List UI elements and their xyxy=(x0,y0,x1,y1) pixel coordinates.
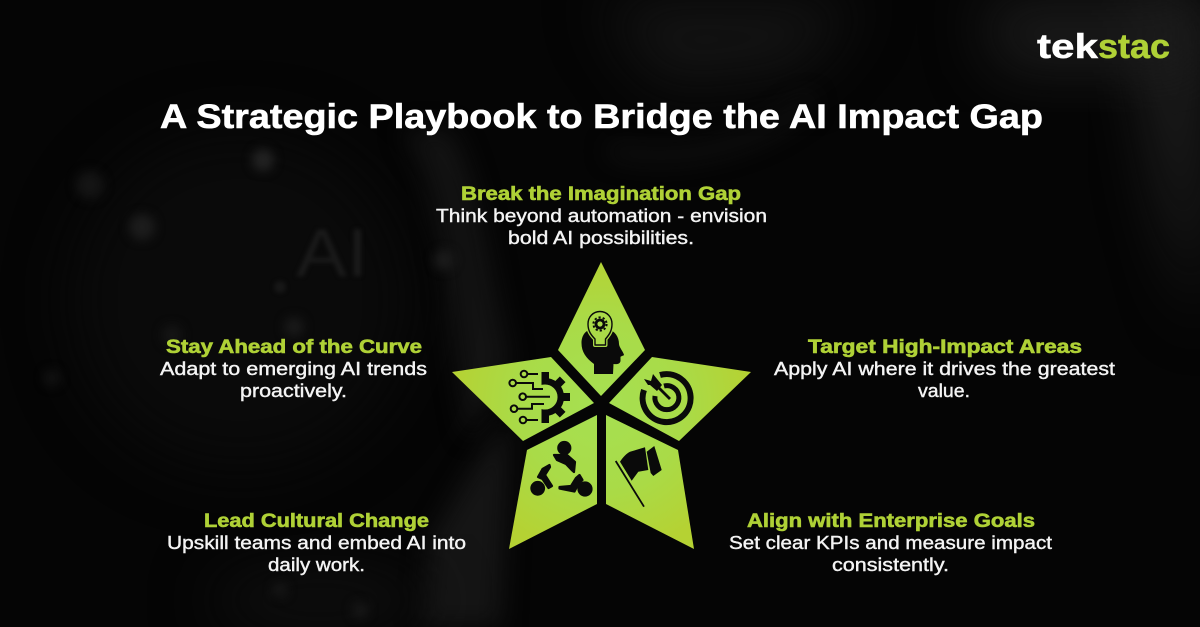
text block: Target High-Impact Areas xyxy=(774,337,1115,401)
text block: Lead Cultural Change: daily work. xyxy=(268,554,365,575)
text block: Break the Imagination Gap xyxy=(436,184,767,248)
text block: Stay Ahead of the Curve: proactively. xyxy=(240,380,347,401)
logo: tekstac xyxy=(1037,28,1170,66)
text block: Break the Imagination Gap: bold AI possibilities. xyxy=(508,227,694,248)
blurred AI letters: AI xyxy=(296,215,368,291)
text block: Break the Imagination Gap: Break the Imagination Gap xyxy=(461,184,741,205)
text block: Lead Cultural Change xyxy=(167,511,466,575)
panel: bottom right star segment xyxy=(606,415,694,549)
text block: Lead Cultural Change: Lead Cultural Change xyxy=(204,511,429,532)
icon: head with lightbulb and gear xyxy=(582,312,624,374)
text block: Target High-Impact Areas: value. xyxy=(918,380,970,401)
icon: target with arrow xyxy=(643,374,691,422)
text block: Align with Enterprise Goals: consistently. xyxy=(832,554,949,575)
icon: gear with circuit lines xyxy=(509,371,570,423)
panel: top star segment xyxy=(558,262,645,396)
text block: Align with Enterprise Goals xyxy=(729,511,1052,575)
icon: three people in a circle xyxy=(531,442,592,496)
logo: tekstac: stac xyxy=(1098,28,1170,66)
title: A Strategic Playbook to Bridge the AI Impact Gap xyxy=(160,98,1043,136)
text block: Align with Enterprise Goals: Set clear KPIs and measure impact xyxy=(729,532,1052,553)
text block: Target High-Impact Areas: Target High-Impact Areas xyxy=(808,337,1082,358)
star diagram xyxy=(452,262,751,549)
panel: bottom left star segment xyxy=(509,415,597,549)
text block: Stay Ahead of the Curve xyxy=(160,337,427,401)
text block: Stay Ahead of the Curve: Adapt to emerging AI trends xyxy=(160,358,427,379)
icon: flags on a pole xyxy=(616,446,662,507)
text block: Lead Cultural Change: Upskill teams and embed AI into xyxy=(167,532,466,553)
panel: left star segment xyxy=(452,357,594,441)
panel: right star segment xyxy=(609,357,751,441)
text block: Target High-Impact Areas: Apply AI where it drives the greatest xyxy=(774,358,1115,379)
text block: Stay Ahead of the Curve: Stay Ahead of the Curve xyxy=(166,337,422,358)
logo: tekstac: tek xyxy=(1037,28,1098,66)
text block: Align with Enterprise Goals: Align with Enterprise Goals xyxy=(747,511,1035,532)
text block: Break the Imagination Gap: Think beyond automation - envision xyxy=(436,205,767,226)
